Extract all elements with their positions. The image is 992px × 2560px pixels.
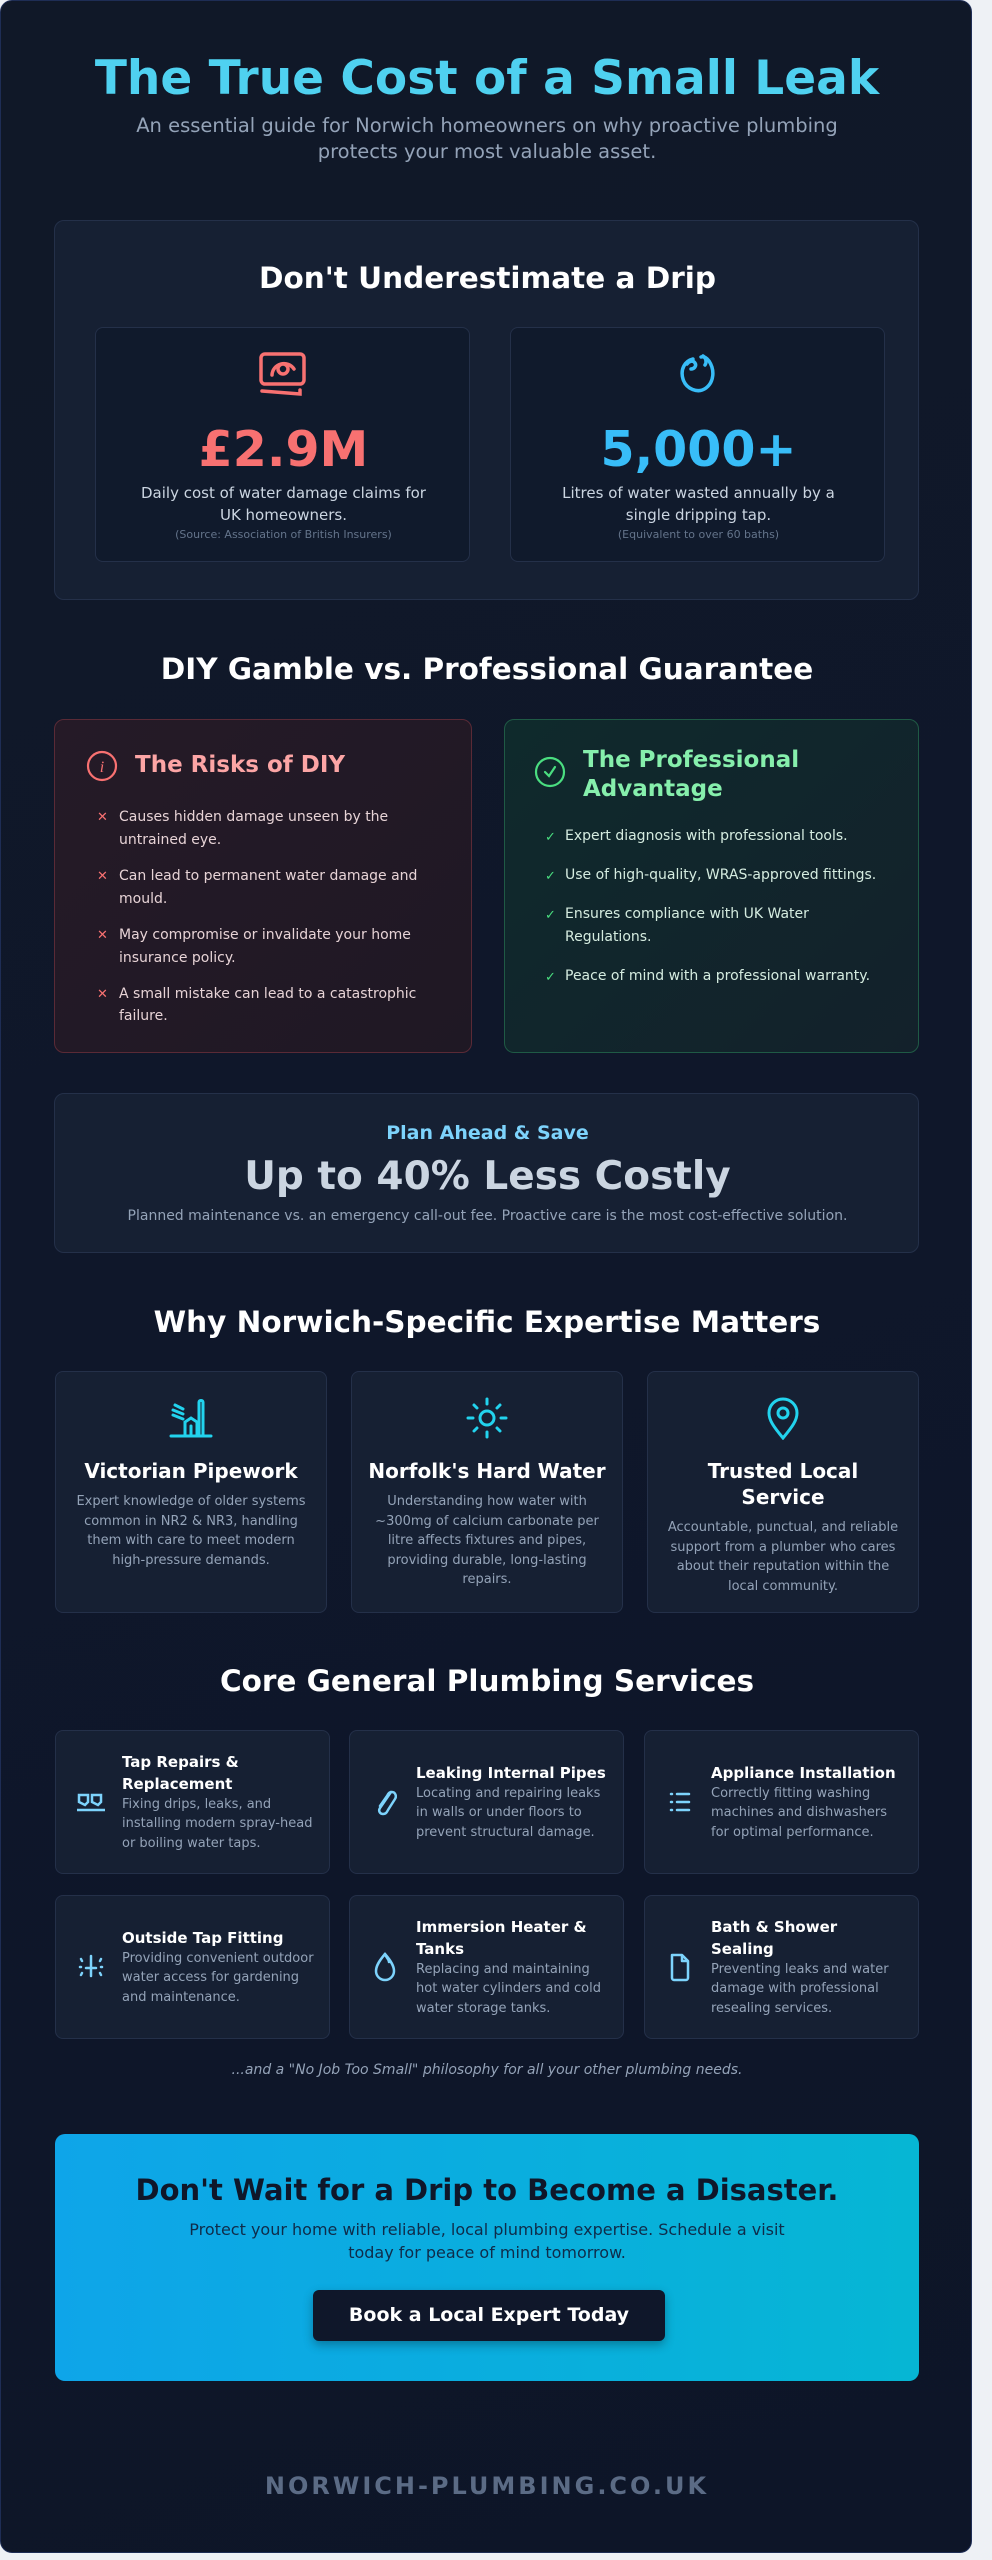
panel: professional advantage [504,719,919,1053]
source note: (Equivalent to over 60 baths) [618,528,779,541]
icon: info [86,750,118,782]
title: The True Cost of a Small Leak [95,51,879,106]
service: appliance installation: Appliance Installation [711,1764,896,1782]
list: risks: ✕ [97,928,108,943]
card: hard water: Norfolk's Hard Water [368,1459,606,1483]
icon: money [259,352,306,396]
icon: file [670,1954,690,1982]
list: risks: ✕ [97,987,108,1002]
subtitle: An essential guide for Norwich homeowners on why proactive plumbing protects your most valuable asset. [136,114,838,163]
source note: (Source: Association of British Insurers) [175,528,392,541]
service: appliance installation [644,1730,919,1874]
list: benefits: Ensures compliance with UK Water Regulations. [565,906,809,945]
text: philosophy note: ...and a "No Job Too Small" philosophy for all your other plumbing needs. [232,2062,742,2078]
list: benefits: Peace of mind with a professional warranty. [565,968,870,984]
service: tap repairs: Fixing drips, leaks, and installing modern spray-head or boiling water taps. [122,1797,312,1851]
stat text: Daily cost of water damage claims for UK homeowners. [141,484,426,524]
list: benefits: ✓ [545,830,556,845]
card: victorian pipework [55,1371,327,1613]
list: risks: May compromise or invalidate your home insurance policy. [119,927,411,966]
card: trusted local: Service [741,1485,825,1509]
heading: risks: The Risks of DIY [135,752,345,778]
card: trusted local: Trusted Local [708,1459,858,1483]
button: book [313,2290,665,2341]
icon: location pin [768,1398,798,1440]
service: leaking pipes [349,1730,624,1874]
service: outside tap [55,1895,330,2039]
icon: paperclip [378,1790,397,1816]
list: risks: Causes hidden damage unseen by the untrained eye. [119,809,388,848]
list: benefits: Expert diagnosis with professional tools. [565,828,848,844]
list: risks: ✕ [97,869,108,884]
CTA heading: Don't Wait for a Drip to Become a Disaster. [136,2173,838,2207]
stat number: £2.9M: £2.9M [199,421,368,478]
service: bath sealing [644,1895,919,2039]
service: immersion heater: Replacing and maintaining hot water cylinders and cold water storage tanks. [416,1962,601,2016]
card: hard water: Understanding how water with ~300mg of calcium carbonate per litre affects fixtures and pipes, providing durable, long-lasting repairs. [375,1494,599,1587]
list: benefits: Use of high-quality, WRAS-approved fittings. [565,867,876,883]
list: risks [97,809,417,1024]
CTA text: Protect your home with reliable, local plumbing expertise. Schedule a visit today for peace of mind tomorrow. [189,2220,785,2262]
service: tap repairs: Tap Repairs & Replacement [122,1753,239,1793]
footer: website: NORWICH-PLUMBING.CO.UK [265,2472,709,2500]
icon: taps [77,1794,105,1812]
panel: risks of DIY [54,719,472,1053]
heading: DIY vs professional: DIY Gamble vs. Professional Guarantee [161,652,813,686]
label: plan ahead: Plan Ahead & Save [386,1122,589,1144]
service: leaking pipes: Locating and repairing leaks in walls or under floors to prevent structural damage. [416,1786,600,1840]
panel: plan ahead & save [54,1093,919,1253]
list: benefits [545,828,876,985]
service: immersion heater [349,1895,624,2039]
stat card: litres [510,327,885,562]
service: outside tap: Providing convenient outdoor water access for gardening and maintenance. [122,1951,314,2005]
big stat: 40%: Up to 40% Less Costly [244,1154,731,1199]
card: trusted local [647,1371,919,1613]
list: risks: Can lead to permanent water damage and mould. [119,868,417,907]
heading: core services: Core General Plumbing Services [220,1664,754,1698]
card: victorian pipework: Expert knowledge of older systems common in NR2 & NR3, handling them with care to meet modern high-pressure demands. [76,1494,306,1568]
service: bath sealing: Bath & Shower Sealing [711,1918,837,1958]
stat text: Litres of water wasted annually by a single dripping tap. [562,484,835,524]
icon: info: i [100,759,104,776]
list: benefits: ✓ [545,869,556,884]
icon: factory pipes [170,1399,212,1438]
icon: flame drop [374,1952,396,1982]
card: hard water [351,1371,623,1613]
heading: Norwich expertise: Why Norwich-Specific Expertise Matters [154,1305,820,1339]
icon: check circle [534,756,566,788]
button: book: Book a Local Expert Today [349,2304,629,2326]
service: outside tap: Outside Tap Fitting [122,1929,283,1947]
panel: don't underestimate a drip [54,220,919,600]
service: tap repairs [55,1730,330,1874]
service: bath sealing: Preventing leaks and water damage with professional resealing services. [711,1962,889,2016]
service: immersion heater: Immersion Heater & Tanks [416,1918,587,1958]
service: leaking pipes: Leaking Internal Pipes [416,1764,606,1782]
icon: water [680,354,715,392]
card: trusted local: Accountable, punctual, and reliable support from a plumber who cares about their reputation within the local community. [668,1520,898,1594]
icon: sparkle tap [78,1954,104,1978]
callout: CTA [55,2134,919,2381]
list: risks: A small mistake can lead to a catastrophic failure. [119,986,416,1024]
stat number: 5,000+: 5,000+ [600,421,797,478]
card: victorian pipework: Victorian Pipework [84,1459,298,1483]
service: appliance installation: Correctly fitting washing machines and dishwashers for optimal performance. [711,1786,887,1840]
icon: list [670,1792,690,1812]
icon: sun [466,1398,508,1438]
list: benefits: ✓ [545,970,556,985]
list: benefits: ✓ [545,908,556,923]
heading: drip: Don't Underestimate a Drip [259,261,716,295]
stat card: cost [95,327,470,562]
text: explanation: Planned maintenance vs. an emergency call-out fee. Proactive care is the most cost-effective solution. [128,1208,847,1224]
heading: professional: The Professional Advantage [583,747,799,802]
list: risks: ✕ [97,810,108,825]
